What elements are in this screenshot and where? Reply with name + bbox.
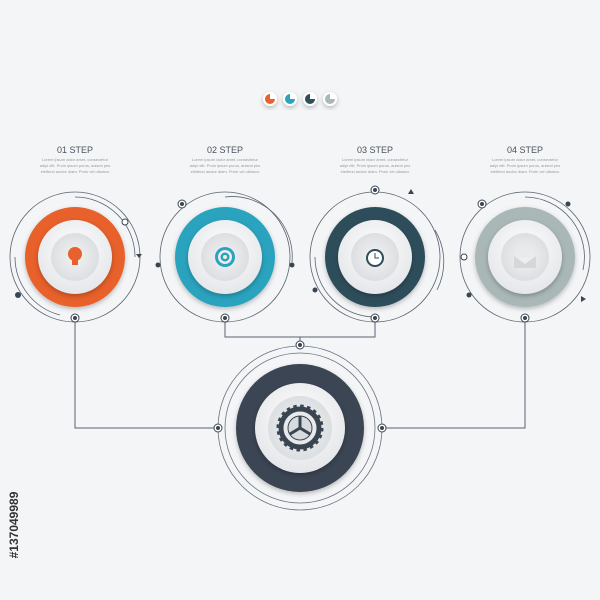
step labels: eleifend auctor diam. Proin vel ullamco bbox=[341, 169, 410, 174]
step labels: eleifend auctor diam. Proin vel ullamco bbox=[491, 169, 560, 174]
step labels: adipi elit. Proin ipsum purus, auismi pes bbox=[340, 163, 410, 168]
step labels: Lorem ipsum dolor amet, consectetur bbox=[492, 157, 559, 162]
step labels: 02 STEP bbox=[207, 145, 243, 155]
step labels: Lorem ipsum dolor amet, consectetur bbox=[42, 157, 109, 162]
step labels bbox=[40, 145, 560, 174]
step 3 circle bbox=[310, 186, 444, 322]
step labels: adipi elit. Proin ipsum purus, auismi pes bbox=[190, 163, 260, 168]
connectors bbox=[75, 322, 525, 428]
step labels: eleifend auctor diam. Proin vel ullamco bbox=[191, 169, 260, 174]
legend dots bbox=[263, 92, 337, 106]
step labels: 01 STEP bbox=[57, 145, 93, 155]
step labels: adipi elit. Proin ipsum purus, auismi pes bbox=[490, 163, 560, 168]
step labels: 04 STEP bbox=[507, 145, 543, 155]
step labels: 03 STEP bbox=[357, 145, 393, 155]
step labels: adipi elit. Proin ipsum purus, auismi pes bbox=[40, 163, 110, 168]
step 4 circle bbox=[460, 192, 590, 322]
step labels: Lorem ipsum dolor amet, consectetur bbox=[342, 157, 409, 162]
icon: gear bbox=[279, 407, 321, 449]
step 1 circle bbox=[10, 192, 142, 322]
step labels: eleifend auctor diam. Proin vel ullamco bbox=[41, 169, 110, 174]
step labels: Lorem ipsum dolor amet, consectetur bbox=[192, 157, 259, 162]
watermark id: #137049989 bbox=[7, 491, 21, 558]
central gear circle bbox=[214, 341, 386, 510]
step 2 circle bbox=[156, 192, 294, 322]
